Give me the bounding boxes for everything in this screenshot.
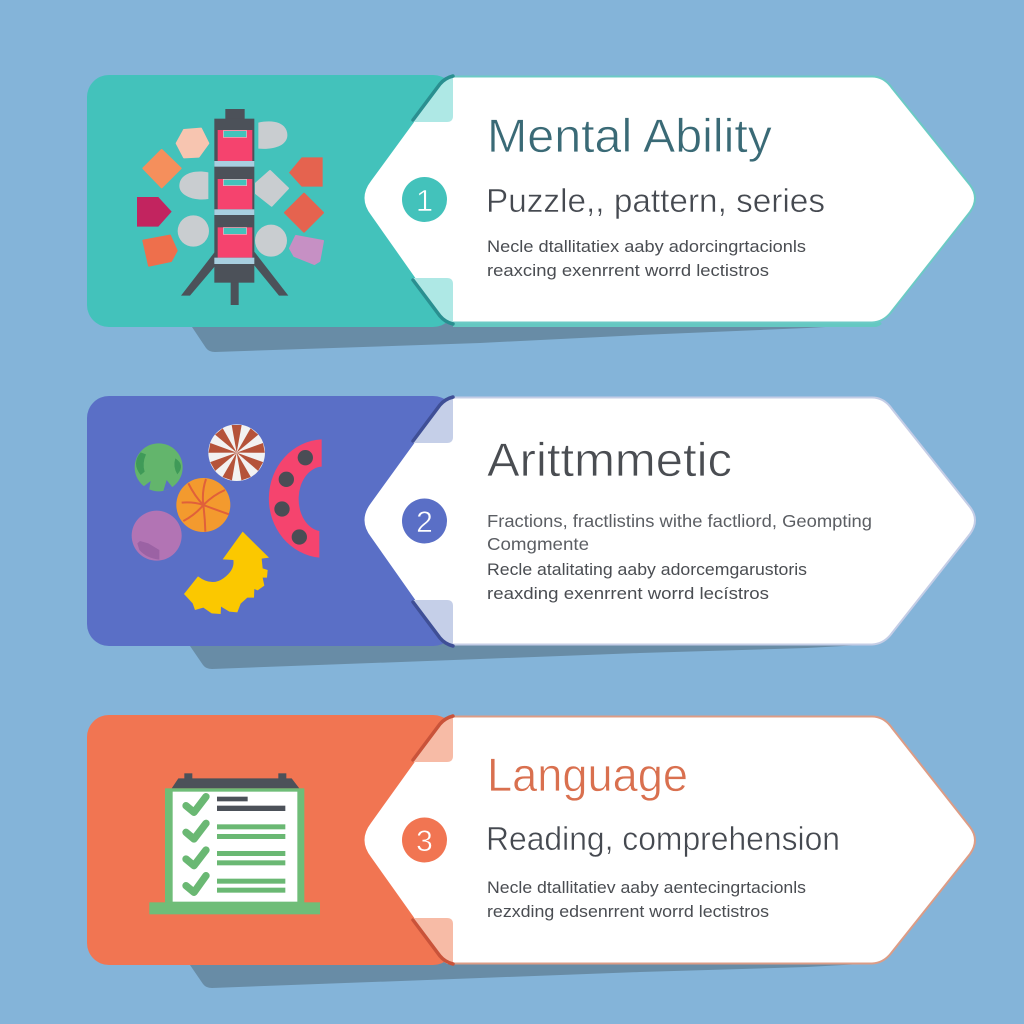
white arrow label bbox=[364, 398, 975, 645]
description: Necle dtallitatiex aaby adorcingrtacionls bbox=[487, 237, 806, 256]
purple ball bbox=[132, 511, 182, 561]
panel: mental ability bbox=[87, 75, 975, 352]
bottom fold edge bbox=[413, 280, 453, 324]
number badge 2 bbox=[402, 498, 447, 544]
number badge 3: 3 bbox=[416, 825, 433, 858]
orange ball bbox=[176, 478, 230, 532]
label outline bbox=[453, 76, 975, 322]
top fold tab bbox=[413, 398, 453, 443]
card shadow bbox=[192, 320, 880, 352]
heading: Mental Ability bbox=[487, 110, 772, 163]
top fold edge bbox=[413, 76, 453, 120]
top fold edge bbox=[413, 397, 453, 441]
text lines bbox=[217, 797, 285, 893]
floating shapes bbox=[137, 121, 323, 266]
card shadow bbox=[190, 640, 880, 669]
bottom fold tab bbox=[413, 278, 453, 322]
number badge 1: 1 bbox=[416, 183, 433, 218]
panel: language bbox=[87, 715, 975, 988]
number badge 1 bbox=[402, 177, 447, 222]
icon: checklist board bbox=[149, 773, 320, 914]
board base bbox=[149, 902, 320, 914]
coloured body bbox=[87, 75, 455, 327]
coloured body bbox=[87, 396, 455, 646]
bottom fold edge bbox=[413, 602, 453, 646]
bottom fold tab bbox=[413, 600, 453, 644]
subheading line 2: Comgmente bbox=[487, 534, 589, 554]
label outline bbox=[453, 398, 975, 644]
green ball bbox=[135, 443, 183, 492]
description: Recle atalitating aaby adorcemgarustoris bbox=[487, 560, 807, 579]
bottom fold tab bbox=[413, 918, 453, 963]
description: Necle dtallitatiev aaby aentecingrtacionls bbox=[487, 878, 806, 897]
striped candy bbox=[208, 424, 265, 481]
yellow gear arrow bbox=[184, 532, 269, 614]
rocket legs bbox=[181, 252, 288, 305]
number badge 3 bbox=[402, 818, 447, 862]
number badge 2: 2 bbox=[416, 506, 433, 539]
icon: math shapes bbox=[132, 424, 322, 614]
heading: Language bbox=[487, 749, 688, 802]
rocket body bbox=[214, 109, 254, 283]
icon: rocket with shapes bbox=[137, 109, 323, 305]
card shadow bbox=[190, 959, 880, 988]
top fold tab bbox=[413, 717, 453, 762]
subheading line 1: Fractions, fractlistins withe factliord, Geompting bbox=[487, 511, 872, 531]
description line 2: reaxding exenrrent worrd lecístros bbox=[487, 584, 769, 603]
white arrow label bbox=[364, 717, 975, 964]
board top bbox=[172, 773, 299, 788]
heading: Arittmmetic bbox=[487, 434, 732, 487]
paper bbox=[173, 792, 297, 902]
top fold edge bbox=[413, 716, 453, 760]
top fold tab bbox=[413, 77, 453, 122]
check marks bbox=[186, 797, 206, 892]
panel: arithmetic bbox=[87, 396, 975, 669]
coloured body bbox=[87, 715, 455, 965]
bottom band bbox=[453, 321, 882, 327]
bottom fold edge bbox=[413, 920, 453, 964]
description line 2: reaxcing exenrrent worrd lectistros bbox=[487, 261, 769, 280]
description line 2: rezxding edsenrrent worrd lectistros bbox=[487, 902, 769, 921]
pink arc bbox=[269, 439, 322, 558]
subheading: Reading, comprehension bbox=[486, 820, 840, 857]
white arrow label bbox=[364, 77, 975, 323]
label outline bbox=[453, 716, 975, 964]
board frame bbox=[165, 788, 304, 903]
subheading: Puzzle,, pattern, series bbox=[486, 182, 825, 219]
